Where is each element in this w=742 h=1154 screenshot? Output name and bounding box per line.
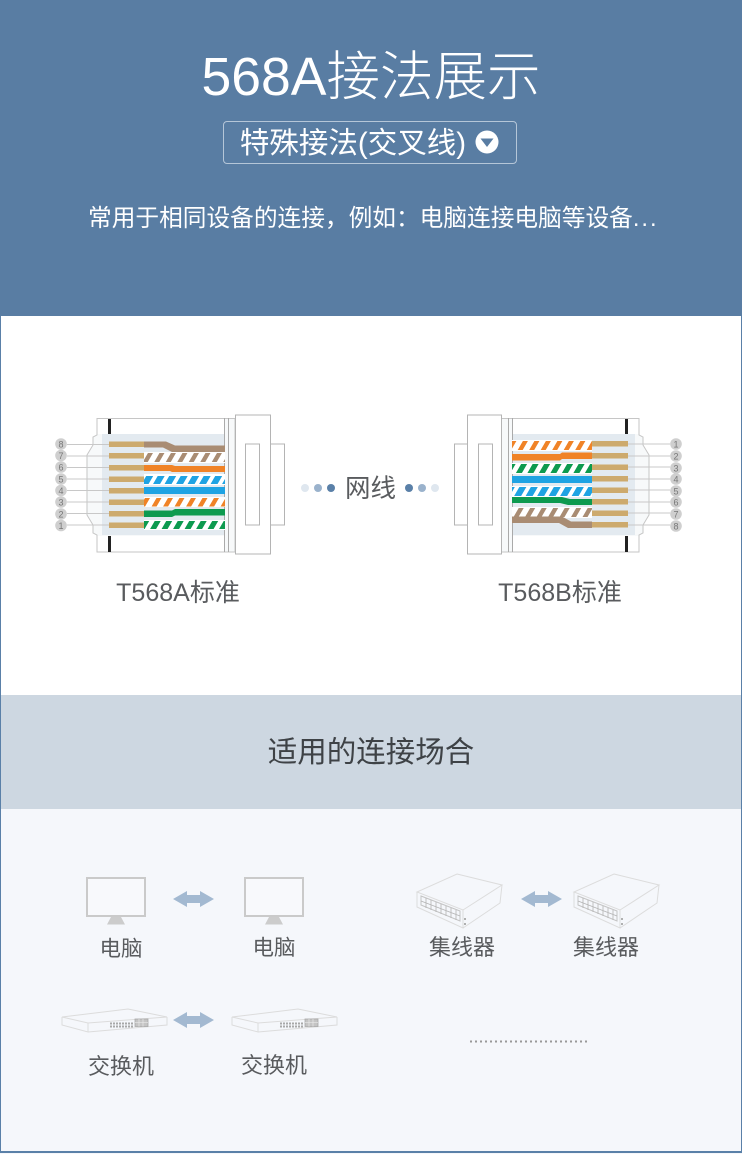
label: T568A: T568A标准 xyxy=(116,579,240,607)
label: computer left: 电脑 xyxy=(99,937,142,961)
header panel xyxy=(0,0,742,316)
connector: T568B: 4 xyxy=(673,474,679,484)
icon: hub left xyxy=(417,874,502,928)
icon: computer left xyxy=(87,878,145,924)
subtitle text: 特殊接法(交叉线) xyxy=(240,127,466,160)
title: 568A接法展示 xyxy=(202,48,540,107)
description text: 常用于相同设备的连接，例如：电脑连接电脑等设备... xyxy=(88,206,659,232)
connector: T568B xyxy=(454,415,682,554)
connector: T568B: 5 xyxy=(673,486,679,496)
arrow: computers xyxy=(173,891,214,907)
connector: T568A: 3 xyxy=(58,498,64,508)
label: T568B: T568B标准 xyxy=(498,579,622,607)
icon: hub right xyxy=(574,874,659,928)
icon: computer right xyxy=(245,878,303,924)
connector: T568B: 1 xyxy=(673,440,679,450)
subtitle button xyxy=(223,121,517,164)
connector: T568B: 6 xyxy=(673,498,679,508)
connector: T568A: 6 xyxy=(58,462,64,472)
label: switch right: 交换机 xyxy=(241,1053,307,1078)
label: hub right: 集线器 xyxy=(573,935,639,960)
section heading: 适用的连接场合 xyxy=(268,736,474,769)
icon: switch right xyxy=(232,1009,337,1032)
arrow: switches xyxy=(173,1012,214,1028)
cable label with dots: 网线 xyxy=(345,475,396,503)
icon: switch left xyxy=(62,1009,167,1032)
section heading band xyxy=(0,695,742,809)
connector: T568A: 4 xyxy=(58,486,64,496)
connector: T568A: 5 xyxy=(58,474,64,484)
wiring diagrams xyxy=(55,414,682,554)
panel: wiring diagram xyxy=(0,316,742,695)
connector: T568B: 3 xyxy=(673,464,679,474)
connector: T568B: 8 xyxy=(673,522,679,532)
label: computer right: 电脑 xyxy=(252,936,296,960)
label: hub left: 集线器 xyxy=(429,935,495,960)
connector: T568B: 7 xyxy=(673,510,679,520)
icon: down triangle xyxy=(476,130,498,154)
cable label with dots xyxy=(301,475,439,503)
frame border xyxy=(0,316,742,1153)
connector: T568A: 7 xyxy=(58,451,64,461)
arrow: hubs xyxy=(521,891,562,907)
connector: T568A: 8 xyxy=(58,440,64,450)
label: switch left: 交换机 xyxy=(88,1054,154,1079)
panel: use cases xyxy=(0,809,742,1154)
ellipsis dots xyxy=(470,1040,588,1042)
connector: T568A: 2 xyxy=(58,510,64,520)
connector: T568A xyxy=(55,415,285,554)
connector: T568A: 1 xyxy=(58,521,64,531)
connector: T568B: 2 xyxy=(673,452,679,462)
